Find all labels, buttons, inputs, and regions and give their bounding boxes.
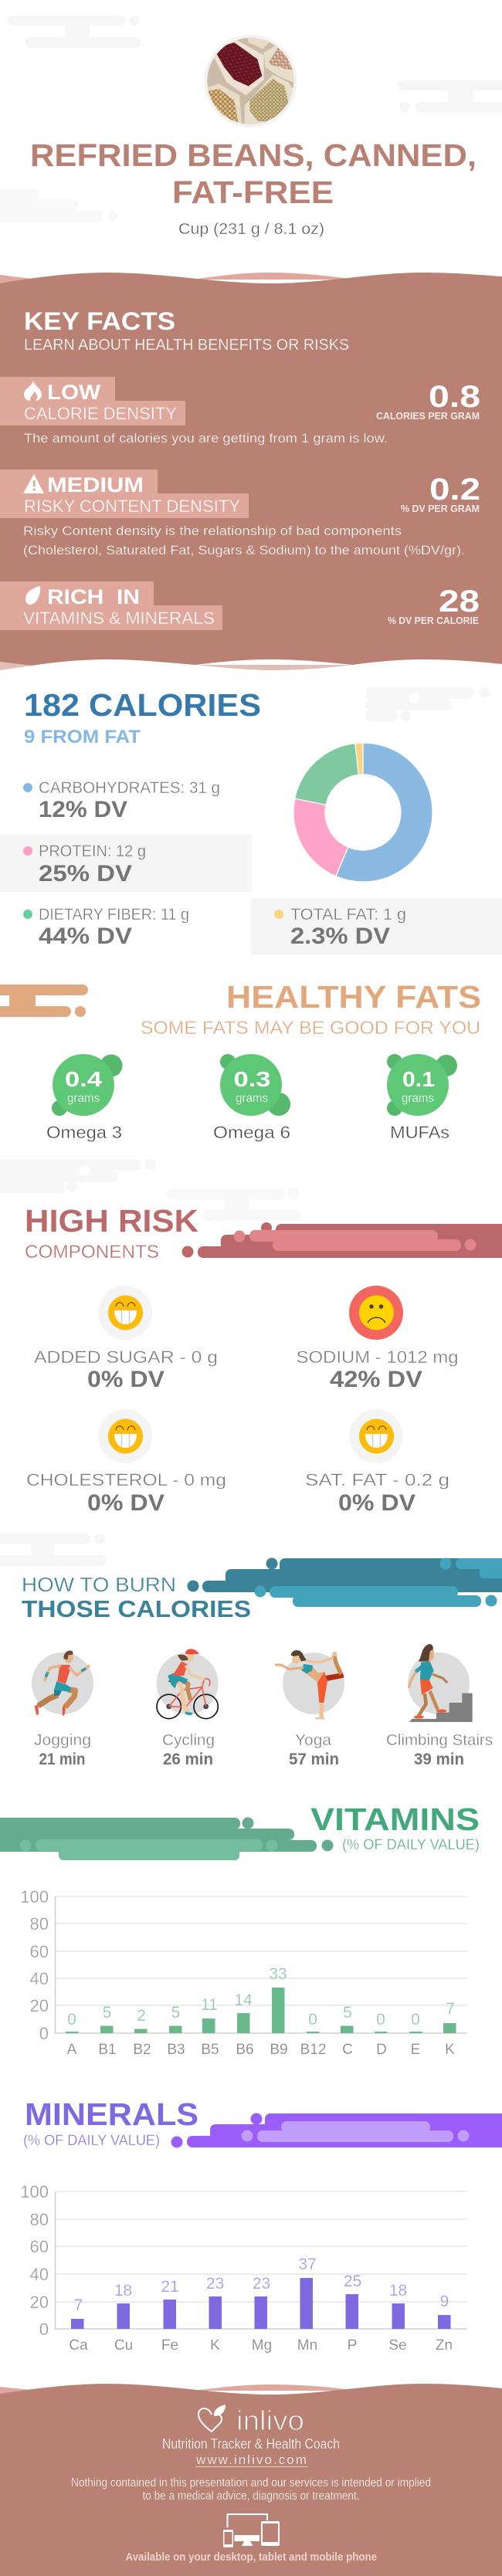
fat badge: MUFAs [387, 1054, 457, 1142]
fat badge: MUFAs: MUFAs [390, 1123, 449, 1142]
bar chart: vitamins: 100 [20, 1887, 49, 1907]
component: saturated fat: 0% DV [338, 1490, 416, 1516]
fact: low calorie density [0, 377, 480, 446]
component: added sugar: 0% DV [87, 1367, 165, 1392]
component: cholesterol: CHOLESTEROL - 0 mg [26, 1470, 226, 1490]
fact: medium risky content density: (Cholesterol, Saturated Fat, Sugars & Sodium) to the amount (%DV/gr). [23, 543, 465, 558]
fact: low calorie density: The amount of calories you are getting from 1 gram is low. [24, 431, 388, 446]
icon: sad face [359, 1296, 394, 1330]
icon: warning triangle [23, 474, 44, 493]
fact: rich in vitamins and minerals: 28 [439, 585, 480, 619]
bar chart: minerals: Mn [297, 2337, 317, 2354]
bar chart: minerals: Fe [161, 2337, 178, 2354]
bar chart: minerals: 40 [30, 2265, 49, 2284]
minerals subheading: (% OF DAILY VALUE) [23, 2133, 160, 2149]
healthy fats subheading: SOME FATS MAY BE GOOD FOR YOU [141, 1018, 480, 1039]
bar chart: vitamins [20, 1887, 467, 2058]
fact: low calorie density: CALORIE DENSITY [24, 404, 177, 423]
fact: medium risky content density: 0.2 [429, 473, 480, 507]
component: cholesterol [26, 1409, 226, 1516]
bar chart: vitamins: E [411, 2042, 420, 2058]
activity: climbing stairs [386, 1644, 493, 1768]
food photo: beans in sacks [204, 35, 297, 127]
legend: protein: PROTEIN: 12 g [39, 842, 146, 860]
activity: cycling: Cycling [162, 1732, 215, 1749]
fact: medium risky content density: % DV PER GRAM [401, 503, 480, 514]
bar chart: vitamins: D [376, 2042, 387, 2058]
website link: www.inlivo.com [195, 2452, 307, 2467]
bar chart: vitamins: B5 [201, 2042, 219, 2058]
legend: carbohydrates [23, 779, 220, 822]
background cloud: burn section [0, 1534, 107, 1566]
bar chart: vitamins: B12 [300, 2042, 326, 2058]
disclaimer: to be a medical advice, diagnosis or treatment. [142, 2490, 360, 2503]
legend: total fat [251, 898, 502, 955]
activity: climbing stairs: Climbing Stairs [386, 1732, 493, 1749]
icon: stair climber [408, 1644, 473, 1722]
legend: protein [0, 835, 252, 892]
bar chart: minerals: 100 [20, 2182, 49, 2201]
fact: low calorie density: LOW [47, 381, 101, 404]
background cloud: calories [365, 687, 490, 721]
how to burn heading: THOSE CALORIES [22, 1595, 251, 1622]
bar chart: minerals: 18 [114, 2282, 132, 2300]
bar chart: vitamins: 0 [411, 2011, 420, 2029]
fact: medium risky content density: RISKY CONTENT DENSITY [24, 497, 240, 516]
bar chart: vitamins: 33 [269, 1965, 287, 1983]
icon: grinning face [108, 1419, 143, 1453]
high risk subheading: COMPONENTS [25, 1242, 159, 1263]
decoration: burn streak [187, 1558, 502, 1607]
logo wordmark: inlivo [236, 2405, 304, 2436]
bar chart: vitamins: 0 [308, 2011, 317, 2029]
bar chart: vitamins: 7 [446, 2000, 455, 2018]
serving size: Cup (231 g / 8.1 oz) [178, 221, 324, 238]
bar chart: minerals: 60 [30, 2237, 49, 2256]
icon: yoga pose [275, 1650, 344, 1720]
background cloud: header right [398, 80, 502, 113]
activity: jogging [32, 1651, 93, 1768]
tagline: Nutrition Tracker & Health Coach [162, 2436, 340, 2452]
panel: key facts [0, 273, 502, 670]
activity: cycling: 26 min [163, 1751, 213, 1768]
fat badge: omega 6: grams [236, 1092, 268, 1105]
legend: dietary fiber [23, 906, 189, 949]
bar chart: vitamins: 5 [343, 2004, 352, 2022]
fact: rich in vitamins and minerals [0, 581, 480, 630]
disclaimer [71, 2476, 431, 2503]
donut chart: calorie sources [293, 743, 432, 882]
bar chart: minerals: 37 [298, 2256, 317, 2273]
bar chart: vitamins: 2 [137, 2007, 146, 2025]
bar chart: minerals: 7 [74, 2296, 83, 2314]
bar chart: minerals [20, 2182, 467, 2354]
legend: carbohydrates: CARBOHYDRATES: 31 g [39, 779, 220, 797]
vitamins subheading: (% OF DAILY VALUE) [342, 1837, 480, 1853]
fact: rich in vitamins and minerals: % DV PER CALORIE [388, 615, 479, 626]
logo: heart and leaf [198, 2405, 226, 2432]
bar chart: minerals: 20 [30, 2293, 49, 2312]
bar chart: minerals: Cu [114, 2337, 133, 2354]
fact: medium risky content density: Risky Content density is the relationship of bad components [23, 524, 402, 538]
background cloud: above high risk left [0, 1158, 156, 1193]
bar chart: vitamins: B9 [270, 2042, 288, 2058]
title: REFRIED BEANS, CANNED, [30, 137, 477, 173]
healthy fats heading: HEALTHY FATS [226, 979, 481, 1015]
icon: desktop, tablet and phone [223, 2514, 280, 2547]
how to burn heading: HOW TO BURN [22, 1573, 176, 1596]
bar chart: minerals: 18 [389, 2282, 407, 2300]
component: sodium: 42% DV [330, 1367, 422, 1392]
fat badge: omega 6: Omega 6 [213, 1123, 290, 1142]
availability note: Available on your desktop, tablet and mobile phone [125, 2551, 377, 2564]
legend: total fat: 2.3% DV [290, 924, 390, 949]
fact: rich in vitamins and minerals: RICH IN [47, 585, 140, 608]
calories heading: 182 CALORIES [24, 687, 261, 723]
minerals heading: MINERALS [25, 2096, 198, 2132]
fact: rich in vitamins and minerals: VITAMINS & MINERALS [23, 608, 215, 628]
bar chart: vitamins: 5 [103, 2004, 111, 2022]
activity: jogging: Jogging [34, 1732, 91, 1749]
component: sodium [297, 1286, 459, 1392]
title [30, 137, 477, 210]
fat badge: omega 3 [46, 1054, 122, 1142]
bar chart: vitamins: A [67, 2042, 77, 2058]
legend: dietary fiber: DIETARY FIBER: 11 g [39, 906, 189, 924]
activity: jogging: 21 min [39, 1751, 85, 1768]
fat badge: omega 3: Omega 3 [46, 1123, 122, 1142]
fat badge: MUFAs: grams [402, 1092, 434, 1105]
fat badge: omega 6: 0.3 [233, 1067, 270, 1091]
high risk heading: HIGH RISK [25, 1203, 198, 1239]
decoration: vitamins streak [0, 1818, 334, 1860]
bar chart: minerals: 25 [344, 2273, 361, 2290]
fact: low calorie density: 0.8 [429, 380, 480, 414]
fat badge: MUFAs: 0.1 [402, 1067, 435, 1091]
legend: carbohydrates: 12% DV [39, 797, 127, 822]
bar chart: minerals: 9 [440, 2293, 449, 2310]
bar chart: minerals: Ca [69, 2337, 88, 2354]
vitamins heading: VITAMINS [310, 1802, 480, 1837]
component: saturated fat: SAT. FAT - 0.2 g [305, 1470, 449, 1490]
component: added sugar [34, 1286, 218, 1392]
bar chart: vitamins: 80 [30, 1914, 49, 1934]
decoration: minerals streak [171, 2113, 502, 2148]
key facts subheading: LEARN ABOUT HEALTH BENEFITS OR RISKS [24, 337, 349, 354]
icon: grinning face [359, 1419, 394, 1453]
component: added sugar: ADDED SUGAR - 0 g [34, 1347, 218, 1367]
activity: yoga: Yoga [295, 1732, 332, 1749]
icon: cyclist [157, 1649, 219, 1719]
bar chart: vitamins: C [342, 2042, 353, 2058]
bar chart: minerals: 21 [161, 2278, 179, 2296]
activity: yoga: 57 min [289, 1751, 339, 1768]
legend: dietary fiber: 44% DV [39, 924, 132, 949]
activity: yoga [275, 1650, 344, 1768]
bar chart: vitamins: 11 [201, 1996, 218, 2014]
icon: flame [24, 381, 42, 401]
decoration: healthy fats streak [0, 985, 88, 1017]
bar chart: vitamins: 5 [171, 2004, 180, 2022]
how to burn heading [22, 1573, 251, 1622]
bar chart: vitamins: 60 [30, 1942, 49, 1961]
key facts heading: KEY FACTS [24, 307, 175, 335]
bar chart: vitamins: K [445, 2042, 455, 2058]
background cloud: title left [0, 189, 117, 222]
activity: climbing stairs: 39 min [414, 1751, 464, 1768]
bar chart: minerals: 23 [253, 2275, 270, 2293]
icon: leaf [25, 586, 40, 605]
disclaimer: Nothing contained in this presentation and our services is intended or implied [71, 2476, 431, 2490]
icon: jogger [32, 1651, 93, 1717]
fact: medium risky content density: MEDIUM [47, 473, 144, 497]
bar chart: minerals: 0 [39, 2320, 49, 2339]
calories from fat: 9 FROM FAT [24, 727, 141, 747]
component: sodium: SODIUM - 1012 mg [297, 1347, 459, 1367]
bar chart: vitamins: 20 [30, 1996, 49, 2015]
legend: protein: 25% DV [39, 861, 132, 886]
fact: medium risky content density [0, 469, 480, 558]
bar chart: vitamins: B2 [133, 2042, 151, 2058]
bar chart: minerals: 23 [206, 2275, 224, 2293]
fat badge: omega 3: 0.4 [65, 1067, 103, 1091]
bar chart: vitamins: B1 [98, 2042, 117, 2058]
activity: cycling [157, 1649, 219, 1768]
background cloud: above high risk right [167, 1188, 301, 1221]
wave accents behind panel [0, 273, 355, 286]
fact: low calorie density: CALORIES PER GRAM [376, 410, 480, 422]
icon: grinning face [108, 1296, 143, 1330]
background cloud: header left [8, 15, 141, 48]
title: FAT-FREE [172, 175, 334, 210]
bar chart: minerals: P [348, 2337, 357, 2354]
fat badge: omega 3: grams [67, 1092, 100, 1105]
component: cholesterol: 0% DV [87, 1490, 165, 1516]
bar chart: vitamins: 14 [234, 1991, 253, 2009]
bar chart: vitamins: B3 [167, 2042, 185, 2058]
fat badge: omega 6 [213, 1054, 290, 1142]
bar chart: minerals: Zn [436, 2337, 453, 2354]
bar chart: vitamins: 0 [376, 2011, 385, 2029]
decoration: high risk streak [182, 1222, 502, 1258]
panel background [0, 273, 502, 666]
bar chart: minerals: 80 [30, 2210, 49, 2229]
bar chart: vitamins: B6 [236, 2042, 254, 2058]
bar chart: minerals: Mg [252, 2337, 272, 2354]
panel: footer [0, 2384, 502, 2576]
bar chart: vitamins: 0 [39, 2024, 49, 2043]
component: saturated fat [305, 1409, 449, 1516]
bar chart: minerals: Se [388, 2337, 407, 2354]
bar chart: minerals: K [210, 2337, 220, 2354]
legend: total fat: TOTAL FAT: 1 g [290, 906, 406, 924]
bar chart: vitamins: 0 [67, 2011, 76, 2029]
bar chart: vitamins: 40 [30, 1969, 49, 1988]
